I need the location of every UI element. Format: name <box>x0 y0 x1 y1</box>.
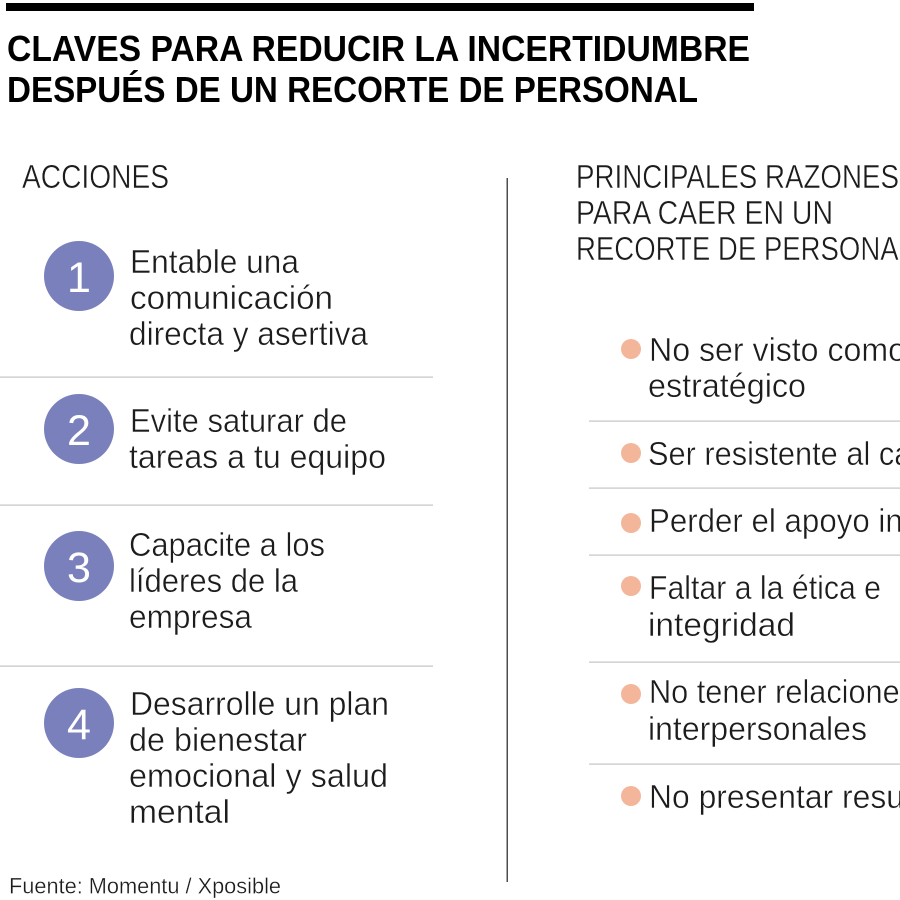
panel: principales razones <box>576 159 900 816</box>
reason 4 <box>621 570 881 644</box>
title: DESPUÉS DE UN RECORTE DE PERSONAL <box>7 69 698 110</box>
title: CLAVES PARA REDUCIR LA INCERTIDUMBRE <box>7 28 750 69</box>
action 1: 1 <box>67 254 91 302</box>
action 4: mental <box>129 794 230 831</box>
action 4: 4 <box>67 701 91 749</box>
action 2: tareas a tu equipo <box>129 439 386 476</box>
column divider <box>507 178 508 882</box>
reason 4: Faltar a la ética e <box>649 570 881 607</box>
panel: acciones <box>0 159 433 831</box>
action 4: emocional y salud <box>129 758 388 795</box>
action 3 <box>44 527 325 636</box>
action 2: Evite saturar de <box>130 403 347 440</box>
reason 4: integridad <box>648 607 795 644</box>
action 4: de bienestar <box>129 722 307 759</box>
action 3: líderes de la <box>129 563 298 600</box>
action 3: Capacite a los <box>129 527 325 564</box>
reason 1 <box>621 332 900 405</box>
heading: principales razones <box>576 159 900 268</box>
action 3: 3 <box>67 544 91 592</box>
action 1 <box>44 241 368 353</box>
action 4 <box>44 686 389 831</box>
action 1: Entable una <box>130 244 299 281</box>
action 2: 2 <box>67 407 91 455</box>
action 1: comunicación <box>130 280 333 317</box>
top rule <box>6 3 754 11</box>
reason 1: estratégico <box>648 368 806 405</box>
heading: acciones: ACCIONES <box>22 159 169 196</box>
action 2 <box>44 394 386 476</box>
reason 5: interpersonales <box>648 711 867 748</box>
action 4: Desarrolle un plan <box>130 686 389 723</box>
action 3: empresa <box>129 599 252 636</box>
title <box>7 28 750 110</box>
heading: principales razones: PARA CAER EN UN <box>576 195 833 232</box>
source note: Fuente: Momentu / Xposible <box>9 874 281 898</box>
action 1: directa y asertiva <box>129 316 368 353</box>
reason 5 <box>621 674 900 748</box>
